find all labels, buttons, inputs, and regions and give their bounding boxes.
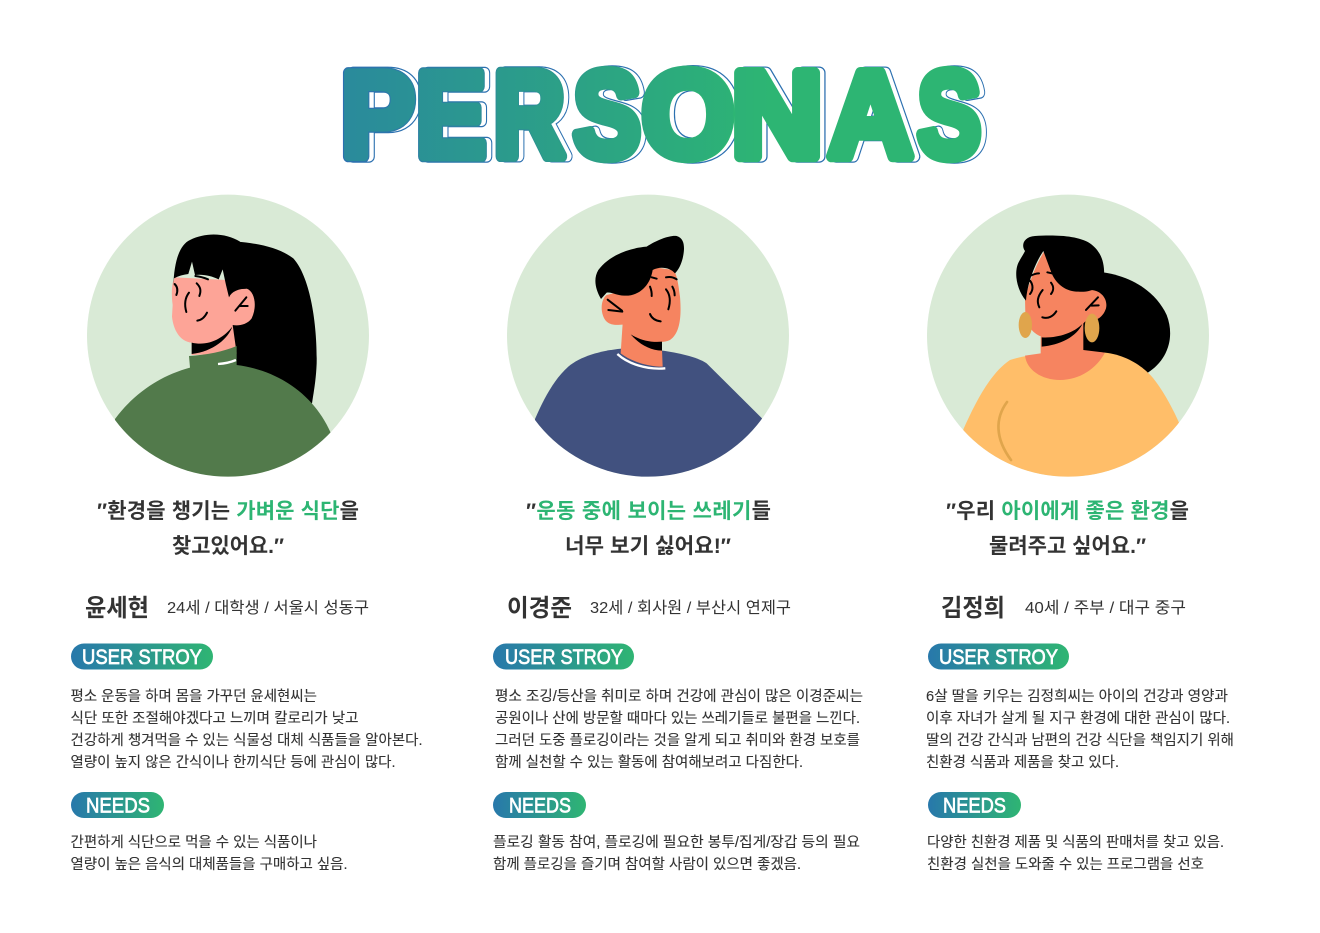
needs text: 다양한 친환경 제품 및 식품의 판매처를 찾고 있음. <box>927 834 1224 851</box>
badge: needs: NEEDS <box>86 794 150 818</box>
badge: needs <box>71 792 164 818</box>
title: O <box>642 46 734 182</box>
icon: woman with long hair avatar <box>87 195 369 490</box>
badge: user story: USER STROY <box>505 646 623 669</box>
details: 40세 / 주부 / 대구 중구 <box>1025 599 1186 617</box>
needs text: 함께 플로깅을 즐기며 참여할 사람이 있으면 좋겠음. <box>493 856 801 873</box>
panel: persona 2 <box>493 195 863 873</box>
user story text: 함께 실천할 수 있는 활동에 참여해보려고 다짐한다. <box>495 754 803 771</box>
panel: persona 1 <box>70 195 422 873</box>
name: 김정희 <box>941 595 1005 622</box>
title: E <box>416 46 486 182</box>
user story text: 건강하게 챙겨먹을 수 있는 식물성 대체 식품들을 알아본다. <box>70 732 422 749</box>
title: P <box>341 46 415 182</box>
title: O <box>642 46 734 182</box>
name: 윤세현 <box>85 595 149 622</box>
title: A <box>834 46 918 182</box>
badge: user story: USER STROY <box>939 646 1058 669</box>
user story text: 평소 조깅/등산을 취미로 하며 건강에 관심이 많은 이경준씨는 <box>495 688 863 705</box>
title: P <box>346 46 420 182</box>
title: P <box>346 46 420 182</box>
title: S <box>918 46 981 182</box>
title: S <box>574 46 640 182</box>
title: A <box>828 46 912 182</box>
user story text: 이후 자녀가 살게 될 지구 환경에 대한 관심이 많다. <box>926 710 1230 727</box>
user story text: 열량이 높지 않은 간식이나 한끼식단 등에 관심이 많다. <box>70 754 396 771</box>
title: E <box>421 46 491 182</box>
title: R <box>494 46 565 182</box>
title: R <box>499 46 570 182</box>
quote: ″운동 중에 보이는 쓰레기들 <box>526 500 771 523</box>
user story text <box>926 688 1234 771</box>
needs text <box>927 834 1224 873</box>
title: O <box>647 46 739 182</box>
title: N <box>732 46 823 182</box>
icon: man with quiff avatar <box>507 195 789 490</box>
details: 32세 / 회사원 / 부산시 연제구 <box>590 599 791 617</box>
user story text: 친환경 식품과 제품을 찾고 있다. <box>926 754 1119 771</box>
user story text: 평소 운동을 하며 몸을 가꾸던 윤세현씨는 <box>70 688 317 705</box>
title: S <box>923 46 986 182</box>
needs text: 간편하게 식단으로 먹을 수 있는 식품이나 <box>70 834 317 851</box>
needs text: 열량이 높은 음식의 대체품들을 구매하고 싶음. <box>70 856 348 873</box>
title: S <box>574 46 640 182</box>
icon: woman with earrings avatar <box>927 195 1209 490</box>
needs text <box>493 834 860 873</box>
title: S <box>578 46 646 182</box>
title: E <box>421 46 491 182</box>
quote line 2: 너무 보기 싫어요!″ <box>565 535 731 558</box>
needs text <box>70 834 348 873</box>
quote line 2: 찾고있어요.″ <box>172 535 284 558</box>
title: N <box>737 46 828 182</box>
quote: ″환경을 챙기는 가벼운 식단을 <box>97 500 359 523</box>
needs text: 플로깅 활동 참여, 플로깅에 필요한 봉투/집게/장갑 등의 필요 <box>493 834 860 851</box>
title: N <box>737 46 828 182</box>
user story text: 6살 딸을 키우는 김정희씨는 아이의 건강과 영양과 <box>926 688 1228 705</box>
title: A <box>828 46 912 182</box>
badge: needs: NEEDS <box>509 794 571 818</box>
name: 이경준 <box>507 595 572 622</box>
title: R <box>494 46 565 182</box>
title: O <box>647 46 739 182</box>
title: P <box>341 46 415 182</box>
title: S <box>923 46 986 182</box>
user story text <box>495 688 863 771</box>
badge: needs <box>493 792 586 818</box>
quote line 2: 물려주고 싶어요.″ <box>989 535 1146 558</box>
title: A <box>834 46 918 182</box>
user story text: 딸의 건강 간식과 남편의 건강 식단을 책임지기 위해 <box>926 732 1234 749</box>
user story text: 공원이나 산에 방문할 때마다 있는 쓰레기들로 불편을 느낀다. <box>495 710 860 727</box>
quote: ″우리 아이에게 좋은 환경을 <box>946 500 1189 523</box>
title: S <box>918 46 981 182</box>
user story text: 그러던 도중 플로깅이라는 것을 알게 되고 취미와 환경 보호를 <box>495 732 860 749</box>
title: R <box>499 46 570 182</box>
title: E <box>416 46 486 182</box>
badge: user story: USER STROY <box>82 646 202 669</box>
details: 24세 / 대학생 / 서울시 성동구 <box>167 599 369 617</box>
panel: persona 3 <box>926 195 1234 873</box>
needs text: 친환경 실천을 도와줄 수 있는 프로그램을 선호 <box>927 856 1204 873</box>
title: N <box>732 46 823 182</box>
badge: needs <box>928 792 1021 818</box>
badge: needs: NEEDS <box>943 794 1006 818</box>
user story text: 식단 또한 조절해야겠다고 느끼며 칼로리가 낮고 <box>70 710 358 727</box>
user story text <box>70 688 422 771</box>
title: S <box>578 46 646 182</box>
title <box>341 46 986 182</box>
